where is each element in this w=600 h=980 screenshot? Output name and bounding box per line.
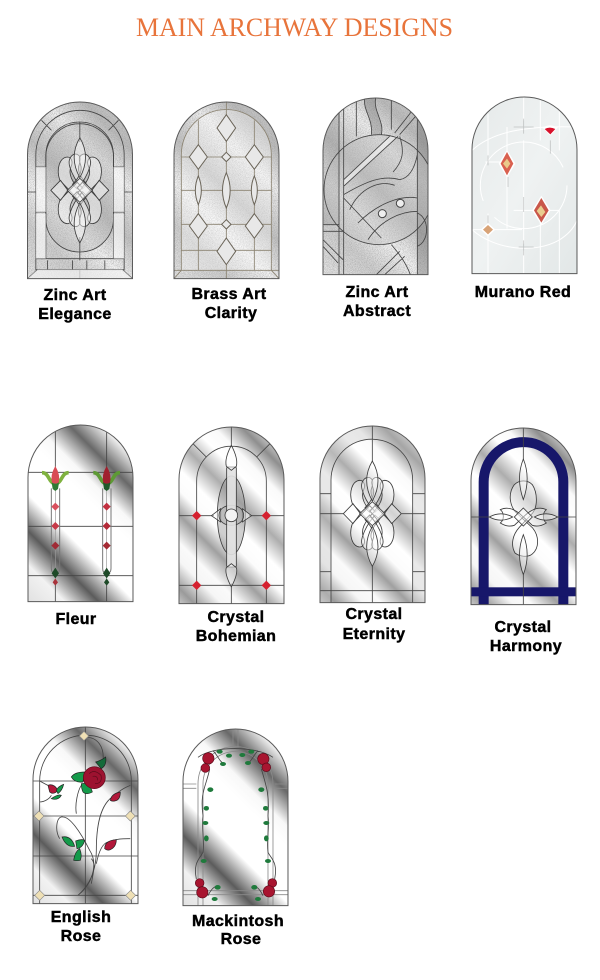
label: Zinc Art Elegance (38, 287, 112, 323)
frame (472, 97, 577, 274)
knot bevel (51, 138, 109, 243)
window: Brass Art Clarity (174, 102, 279, 279)
rosebud and buds (48, 784, 120, 850)
red gems (192, 511, 271, 590)
window: Fleur (28, 425, 133, 602)
window: Crystal Eternity (320, 426, 425, 603)
label: Crystal Bohemian (196, 609, 276, 645)
frame (471, 428, 576, 605)
window: Mackintosh Rose (183, 729, 288, 906)
label: Crystal Harmony (490, 619, 562, 655)
label: Crystal Eternity: Crystal (345, 606, 403, 623)
leaves (62, 837, 85, 861)
window: Murano Red (472, 97, 577, 274)
leaves (201, 750, 271, 901)
frame (33, 727, 138, 904)
label: English Rose (51, 909, 111, 945)
label: Crystal Harmony: Crystal (494, 619, 552, 636)
blue band (471, 442, 576, 605)
label: Brass Art Clarity: Brass Art (191, 286, 267, 303)
window: Crystal Harmony (471, 428, 576, 605)
label: English Rose: English (51, 909, 111, 926)
stem gems (51, 503, 111, 586)
window: English Rose (33, 727, 138, 904)
label: Brass Art Clarity (191, 286, 267, 322)
window: Zinc Art Abstract (323, 98, 434, 275)
label: Mackintosh Rose: Mackintosh (192, 913, 284, 930)
label: Brass Art Clarity: Clarity (205, 305, 257, 322)
label: Mackintosh Rose: Rose (221, 931, 261, 948)
label: Zinc Art Abstract (343, 284, 411, 320)
label: Crystal Bohemian: Bohemian (196, 628, 276, 645)
tulip left (42, 466, 69, 491)
red glass diamonds (481, 125, 558, 236)
label: English Rose: Rose (61, 928, 101, 945)
knot bevel (343, 461, 401, 566)
label: Zinc Art Elegance: Zinc Art (43, 287, 107, 304)
label: Mackintosh Rose (192, 913, 284, 948)
title: MAIN ARCHWAY DESIGNS (136, 13, 453, 42)
frame (183, 729, 288, 906)
cream diamonds (34, 731, 136, 900)
label: Zinc Art Abstract: Zinc Art (345, 284, 409, 301)
window: Zinc Art Elegance (28, 102, 132, 279)
label: Crystal Eternity: Eternity (343, 626, 405, 643)
label: Crystal Eternity (343, 606, 405, 643)
label: Crystal Bohemian: Crystal (207, 609, 265, 626)
roses (195, 753, 277, 898)
knot bevel (489, 459, 558, 575)
frame (320, 426, 425, 603)
frame (323, 98, 428, 275)
frame (174, 102, 279, 279)
window: Crystal Bohemian (179, 427, 284, 604)
stems (40, 737, 130, 895)
tulip right (93, 466, 120, 491)
frame (179, 427, 284, 604)
label: Fleur: Fleur (55, 611, 97, 628)
central bevel (211, 445, 252, 587)
frame (28, 102, 132, 279)
rose (71, 757, 106, 794)
label: Zinc Art Abstract: Abstract (343, 303, 411, 320)
frame (28, 425, 133, 602)
label: Murano Red: Murano Red (475, 284, 571, 301)
label: Zinc Art Elegance: Elegance (38, 306, 112, 323)
label: Crystal Harmony: Harmony (490, 638, 562, 655)
